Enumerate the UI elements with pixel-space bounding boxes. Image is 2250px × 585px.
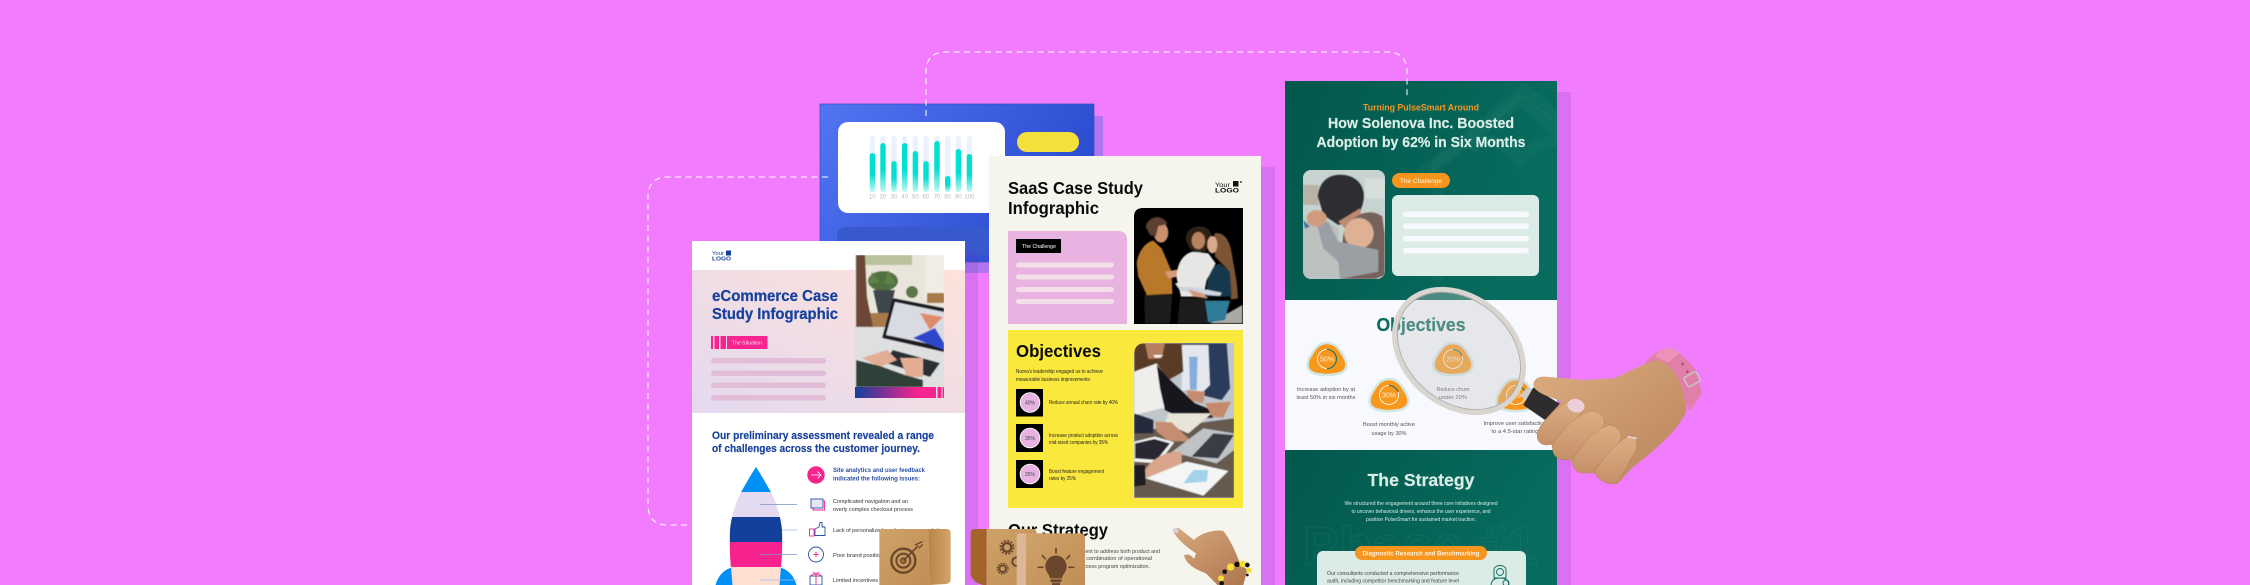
bar chart: 50 xyxy=(912,194,919,200)
phase pill: Diagnostic Research and Benchmarking xyxy=(1362,550,1480,558)
callout: site analytics: indicated the following issues: xyxy=(833,476,920,482)
objective: 40% xyxy=(1016,389,1118,416)
objective: 25%: Boost feature engagement xyxy=(1049,469,1104,475)
intro text: to uncover behavioral drivers, enhance the user experience, and xyxy=(1352,509,1490,515)
heading: preliminary assessment: Our preliminary assessment revealed a range xyxy=(712,430,934,442)
photo: person on laptop xyxy=(855,255,944,387)
issue: incentives: Limited incentives for repeat purchase xyxy=(833,578,929,584)
intro text xyxy=(1016,369,1103,383)
objective text: satisfaction: to a 4.5-star rating xyxy=(1492,429,1538,435)
dashed connector: left xyxy=(648,177,828,525)
section: the strategy xyxy=(1285,450,1557,585)
title: eCommerce Case xyxy=(712,288,838,305)
phase text xyxy=(1327,571,1459,584)
bar chart: 70 xyxy=(934,194,941,200)
logo: Your xyxy=(712,251,724,257)
objective blob: 30% xyxy=(1370,379,1408,411)
lower panel xyxy=(837,227,1077,255)
objective: 25%: 25% xyxy=(1025,472,1036,478)
chart card xyxy=(838,122,1005,213)
objective text: satisfaction xyxy=(1484,421,1546,435)
phase text: audit, including competitor benchmarking and feature level xyxy=(1327,578,1459,584)
icon: wooden lightbulb cube xyxy=(1017,533,1085,585)
card shadow: healthcare xyxy=(1298,92,1571,585)
objective: 40%: 40% xyxy=(1025,400,1036,406)
header band xyxy=(692,270,965,413)
issue: personalization: Lack of personalized product recommendations xyxy=(833,528,948,534)
photo: team at table xyxy=(1134,343,1234,498)
dashed connector: top xyxy=(926,52,1407,116)
icon: wooden target cube xyxy=(879,529,951,585)
objective blob: 50% xyxy=(1308,343,1346,375)
title: Infographic xyxy=(1008,198,1099,218)
eyebrow: Turning PulseSmart Around xyxy=(1363,102,1479,112)
objective text: usage: usage by 30% xyxy=(1372,431,1406,437)
issue: brand positioning: Poor brand positioning xyxy=(833,553,891,559)
objective: 35%: mid-sized companies by 35% xyxy=(1049,440,1108,446)
title xyxy=(712,288,838,323)
heading: The Strategy xyxy=(1368,470,1475,490)
photo: three colleagues xyxy=(1134,208,1243,324)
objective: 35%: Increase product adoption across xyxy=(1049,433,1118,439)
challenge panel xyxy=(1392,195,1539,276)
callout: site analytics xyxy=(833,467,925,482)
objective: 40%: Reduce annual churn rate by 40% xyxy=(1049,400,1118,406)
logo xyxy=(712,250,732,262)
heading: Our Strategy: Our Strategy xyxy=(1008,520,1108,540)
logo: Your xyxy=(1215,182,1231,189)
title xyxy=(1008,178,1143,218)
heading: preliminary assessment xyxy=(712,430,934,455)
objective: 25%: rates by 25% xyxy=(1049,476,1076,482)
panel: eCommerce case study card xyxy=(692,241,965,585)
objective blob: satisfaction: 4.5 xyxy=(1511,392,1521,400)
callout: site analytics: Site analytics and user feedback xyxy=(833,467,925,474)
icon: target dial xyxy=(808,547,824,562)
objective text: churn: under 20% xyxy=(1439,395,1467,401)
objective text: usage: Boost monthly active xyxy=(1363,422,1415,428)
panel: The Challenge xyxy=(1008,231,1127,324)
strategy text xyxy=(1008,549,1160,570)
bar chart: 10 xyxy=(869,194,876,200)
heading: preliminary assessment: of challenges across the customer journey. xyxy=(712,443,920,455)
objective: 25% xyxy=(1016,460,1104,488)
section chip: The Challenge xyxy=(1392,173,1450,188)
panel: blue dashboard card xyxy=(820,104,1094,262)
watermark: Phase #1: Phase #1 xyxy=(1303,516,1538,576)
icon: consultant xyxy=(1491,566,1509,585)
logo: LOGO xyxy=(1215,188,1239,194)
bar chart: 60 xyxy=(923,194,930,200)
decorative emblem xyxy=(1431,92,1557,173)
objective text: adoption: Increase adoption by at xyxy=(1297,387,1355,393)
icon: browser window xyxy=(811,499,824,510)
issue: navigation xyxy=(833,499,913,513)
title xyxy=(1316,116,1526,151)
title: Study Infographic xyxy=(712,306,838,323)
bar chart: 40 xyxy=(901,194,909,200)
bar chart: 20 xyxy=(880,194,887,200)
intro text: We structured the engagement around three core initiatives designed xyxy=(1344,501,1498,507)
heading: Objectives xyxy=(1376,315,1466,335)
intro text: measurable business improvements: xyxy=(1016,377,1091,383)
objective text: satisfaction: Improve user satisfaction xyxy=(1484,421,1546,427)
placeholder text lines xyxy=(711,358,826,400)
bar chart: 100 xyxy=(964,194,975,200)
objective blob: 50%: 50% xyxy=(1320,356,1334,364)
bar chart xyxy=(869,136,975,200)
intro text xyxy=(1344,501,1498,523)
objective blob: 30%: 30% xyxy=(1382,392,1396,400)
section: objectives xyxy=(1285,300,1557,450)
objective blob: satisfaction xyxy=(1497,379,1535,411)
photo: father and daughter xyxy=(1303,170,1385,279)
objective: 35%: 35% xyxy=(1025,436,1036,442)
strategy text: We designed a phased engagement to address both product and xyxy=(1008,549,1160,555)
section chip: The Situation: The Situation xyxy=(732,340,762,346)
rocket diagram xyxy=(714,460,798,585)
phase pill xyxy=(1355,546,1487,560)
objective: 35% xyxy=(1016,424,1118,452)
panel: healthcare case study card xyxy=(1285,81,1557,585)
icon: gift box xyxy=(810,572,822,585)
objective text: churn: Reduce churn xyxy=(1436,387,1470,393)
section chip: The Situation xyxy=(711,336,768,349)
intro text: position PulseSmart for sustained market traction. xyxy=(1366,517,1476,523)
icon: arrow in pink circle xyxy=(807,466,825,484)
icon: thumbs up xyxy=(810,522,825,536)
icon: magnifying glass in hand xyxy=(1370,264,1702,484)
title: SaaS Case Study xyxy=(1008,178,1143,198)
icon: wooden gears cube xyxy=(971,529,1037,585)
strategy text: improvements and customer success program optimization. xyxy=(1008,564,1150,570)
phase text: Our consultants conducted a comprehensive performance xyxy=(1327,571,1459,577)
objective text: churn xyxy=(1436,387,1470,401)
section chip: The Challenge xyxy=(1022,244,1056,250)
card shadow: eCommerce xyxy=(705,251,978,585)
issue: navigation: overly complex checkout process xyxy=(833,507,913,513)
phase panel xyxy=(1317,551,1526,585)
section chip: The Challenge: The Challenge xyxy=(1400,178,1442,185)
objective text: adoption xyxy=(1296,387,1356,401)
bar chart: 80 xyxy=(944,194,952,200)
logo: LOGO xyxy=(712,256,732,262)
magnifier handle xyxy=(1520,387,1562,420)
hand xyxy=(1533,348,1702,484)
issue: navigation: Complicated navigation and an xyxy=(833,499,908,505)
logo xyxy=(1215,181,1242,194)
title: How Solenova Inc. Boosted xyxy=(1328,116,1514,132)
objective text: adoption: least 50% in six months xyxy=(1296,395,1356,401)
photo strip xyxy=(855,387,944,398)
card shadow: SaaS xyxy=(1002,167,1275,585)
yellow pill xyxy=(1017,132,1079,152)
objective blob: 20% xyxy=(1434,343,1472,375)
illustration: pointing hand xyxy=(1172,527,1252,585)
bar chart: 90 xyxy=(955,194,962,200)
panel: Objectives xyxy=(1008,330,1243,508)
heading: Objectives xyxy=(1016,341,1101,361)
intro text: Noora's leadership engaged us to achieve xyxy=(1016,369,1103,375)
panel: SaaS case study card xyxy=(989,156,1261,585)
strategy text: customer challenges through a combination of operational xyxy=(1008,556,1152,562)
magnifier lens xyxy=(1370,264,1548,438)
bar chart: 30 xyxy=(891,194,898,200)
title: Adoption by 62% in Six Months xyxy=(1316,135,1526,151)
objective blob: 20%: 20% xyxy=(1446,356,1460,364)
objective text: usage xyxy=(1363,422,1415,437)
card shadow: dashboard xyxy=(829,116,1103,273)
